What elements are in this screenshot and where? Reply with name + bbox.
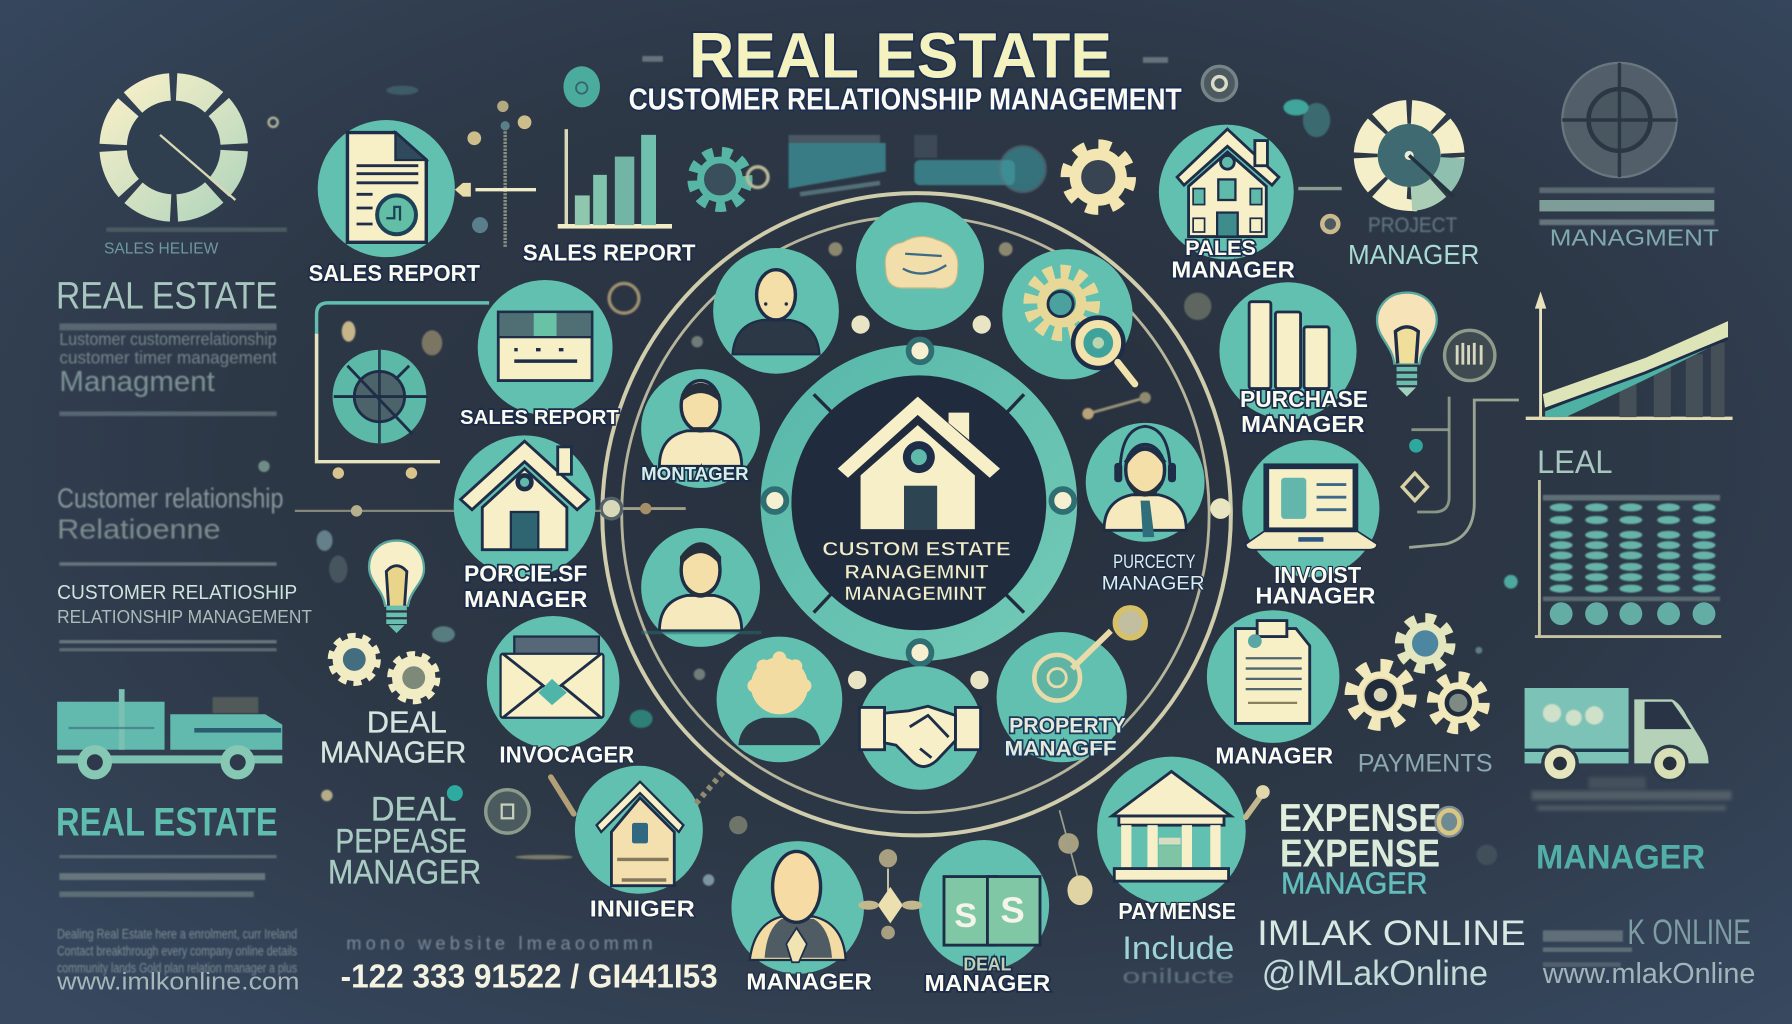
- leal label: LEAL: [1537, 444, 1613, 480]
- outer circle: house inniger: [575, 766, 703, 922]
- contact paragraph: Contact breakthrough every company online details: [57, 943, 297, 958]
- blurred text block: Lustomer customerrelationship: [59, 329, 277, 349]
- ring nodes: [763, 339, 1074, 664]
- project manager label: [1348, 212, 1479, 270]
- blurred text block: Managment: [59, 366, 215, 398]
- relationship management caption: RELATIONSHIP MANAGEMENT: [57, 606, 312, 627]
- expense block: MANAGER: [1281, 866, 1427, 901]
- teal blob icon: [1283, 99, 1330, 137]
- center hub: [763, 339, 1074, 664]
- label: [464, 561, 588, 612]
- contact paragraph: [57, 926, 297, 976]
- hub caption: MANAGEMINT: [845, 583, 986, 605]
- customer relationship block: [57, 482, 283, 566]
- include block: Include: [1122, 930, 1234, 966]
- inner circle: property manager: [997, 608, 1145, 762]
- deal pepease manager label: PEPEASE: [335, 823, 467, 861]
- cream gear: [1069, 147, 1128, 207]
- phone and website block: [341, 933, 718, 995]
- management block: [1539, 187, 1719, 251]
- small teal leaf icon: [563, 66, 600, 107]
- label: MANAGER: [925, 970, 1051, 996]
- imlak online faint brand: www.mlakOnline: [1542, 958, 1755, 990]
- payments label: PAYMENTS: [1358, 749, 1493, 777]
- right donut: [1348, 94, 1470, 217]
- outer circle: house porciest manager: [454, 435, 595, 612]
- chart board left: [317, 303, 489, 479]
- outer circle: manager person: [731, 841, 873, 995]
- deal pepease manager label: DEAL: [371, 791, 457, 829]
- include block: [1122, 930, 1234, 988]
- blurred teal banner: [747, 135, 1046, 194]
- label: SALES REPORT: [523, 240, 695, 266]
- deal manager label: [320, 705, 466, 769]
- imlak online faint brand: [1542, 912, 1755, 990]
- label: MANAGER: [746, 969, 873, 995]
- right lightbulb: [1377, 293, 1437, 397]
- teal ring: [776, 360, 1062, 646]
- inner circle: person top left: [713, 248, 839, 374]
- label: MANAGER: [1171, 257, 1295, 283]
- heading: real estate: REAL ESTATE: [689, 20, 1112, 92]
- label: SALES REPORT: [460, 406, 619, 429]
- outer circle: sales report document: [309, 120, 480, 286]
- outer circle: dollar bills: S: [1000, 889, 1025, 930]
- blurred text block: [59, 323, 277, 416]
- deal pepease manager label: MANAGER: [328, 853, 481, 891]
- subheading: CUSTOMER RELATIONSHIP MANAGEMENT: [629, 82, 1182, 117]
- deal manager label: DEAL: [367, 705, 447, 740]
- imlak online faint brand: K ONLINE: [1627, 912, 1751, 952]
- label: MANAGER: [1215, 742, 1334, 768]
- faint website label: mono website lmeaoommn: [346, 933, 653, 954]
- project manager label: MANAGER: [1348, 239, 1479, 270]
- small teal dot and ring icon: [447, 777, 574, 833]
- label: MANAGER: [464, 586, 588, 612]
- label: INNIGER: [590, 896, 695, 922]
- label: purcecty manager: MANAGER: [1102, 573, 1205, 595]
- label: purcecty manager: [1102, 551, 1205, 595]
- hub caption: CUSTOM ESTATE: [822, 538, 1011, 560]
- background smudge icons: [258, 56, 1497, 886]
- outer circle: sales report card: [460, 280, 619, 429]
- blurred text block: customer timer management: [59, 347, 277, 367]
- gears left: [334, 639, 434, 698]
- inner circle: gears and magnifier: [1002, 249, 1135, 384]
- customer relationship block: Customer relationship: [57, 482, 283, 513]
- website: www.imlkonline.com: [56, 969, 299, 996]
- phone number: -122 333 91522 / GI441I53: [341, 958, 718, 995]
- label: sales review: SALES HELIEW: [104, 241, 219, 258]
- inner circle: montager person: [641, 369, 760, 488]
- outer circle: dollar bills: [919, 840, 1051, 996]
- dot table right: [1535, 480, 1721, 637]
- connector beads: [696, 770, 1270, 939]
- contact paragraph: community lands Gold plan relation manager a plus: [57, 961, 297, 976]
- label: HANAGER: [1255, 582, 1376, 608]
- label: MANAGMENT: [1550, 225, 1719, 251]
- hub caption: [822, 538, 1011, 605]
- contact paragraph: Dealing Real Estate here a enrolment, curr Ireland: [57, 926, 297, 941]
- outer circle: bar icons: [1219, 282, 1368, 437]
- customer relationship block: Relatioenne: [57, 513, 221, 544]
- grey target top right: [1562, 63, 1677, 177]
- small grey ring icon: [1202, 66, 1237, 101]
- teal gear: [695, 154, 745, 205]
- round barcode badge: [1445, 330, 1495, 381]
- real estate teal heading: REAL ESTATE: [56, 800, 278, 844]
- imlak online brand: [1257, 913, 1526, 993]
- connector next to donut: [1298, 189, 1342, 234]
- label: MANAGER: [1241, 411, 1365, 437]
- outer circle: envelope: [487, 616, 635, 767]
- top bar chart: [523, 129, 695, 266]
- label: [1171, 235, 1295, 283]
- outer circle: laptop: [1242, 440, 1379, 608]
- expense block: EXPENSE: [1280, 832, 1440, 875]
- inner circle: headset person: [1086, 423, 1205, 595]
- inner circle: top badge: [856, 202, 984, 330]
- deal pepease manager label: [328, 791, 481, 891]
- small connector cross: [455, 101, 536, 247]
- imlak online brand: @IMLakOnline: [1262, 953, 1488, 993]
- small gold badge: [1435, 807, 1463, 837]
- inner circle: curly person: [717, 637, 842, 762]
- outer circle: dollar bills: S: [954, 897, 977, 935]
- label: PAYMENSE: [1118, 898, 1236, 924]
- small right marks: [1400, 439, 1518, 589]
- label: [925, 953, 1051, 996]
- label: property manager: [1005, 713, 1126, 760]
- outer circle: house pales manager: [1159, 125, 1295, 283]
- project manager label: PROJECT: [1368, 212, 1457, 237]
- expense block: EXPENSE: [1279, 797, 1441, 840]
- outer circle: document manager: [1207, 610, 1339, 768]
- label: PURCHASE: [1240, 386, 1368, 412]
- label: [1240, 386, 1368, 437]
- imlak online brand: IMLAK ONLINE: [1257, 913, 1526, 953]
- label: property manager: PROPERTY: [1009, 713, 1126, 738]
- label: DEAL: [963, 953, 1011, 974]
- label: PORCIE.SF: [464, 561, 587, 587]
- house icon: [838, 397, 1000, 529]
- expense block: [1279, 797, 1441, 901]
- inner circle: handshake: [858, 666, 982, 790]
- deal manager label: MANAGER: [320, 734, 466, 769]
- label: purcecty manager: PURCECTY: [1113, 551, 1195, 573]
- lightbulb left: [369, 541, 424, 633]
- segmented donut top left: [110, 84, 238, 211]
- smudged banner right: [1531, 777, 1731, 810]
- label: [1255, 562, 1376, 608]
- title: [629, 20, 1182, 117]
- manager teal label: MANAGER: [1536, 839, 1705, 877]
- line chart right: [1526, 291, 1733, 418]
- left column panel: [56, 84, 312, 996]
- label: INVOCAGER: [499, 741, 635, 767]
- real estate heading: REAL ESTATE: [56, 275, 278, 317]
- gears bottom right: [1353, 621, 1482, 727]
- connector lines right: [1409, 397, 1519, 547]
- outer circle: bank building: [1097, 757, 1246, 924]
- label: PALES: [1185, 235, 1256, 260]
- label: SALES REPORT: [309, 260, 480, 286]
- customer relationship caption: CUSTOMER RELATIOSHIP: [57, 581, 297, 604]
- inner circle: person lower left: [641, 528, 761, 647]
- truck right: [1525, 688, 1709, 781]
- label: INVOIST: [1274, 562, 1361, 588]
- hub caption: RANAGEMNIT: [845, 561, 989, 583]
- inner ring dots: [848, 315, 991, 689]
- label: property manager: MANAGFF: [1005, 735, 1117, 760]
- label: montager: MONTAGER: [641, 463, 749, 484]
- include block: onilucte: [1122, 965, 1234, 988]
- truck left: [57, 689, 282, 775]
- center outer rings: [295, 193, 1231, 835]
